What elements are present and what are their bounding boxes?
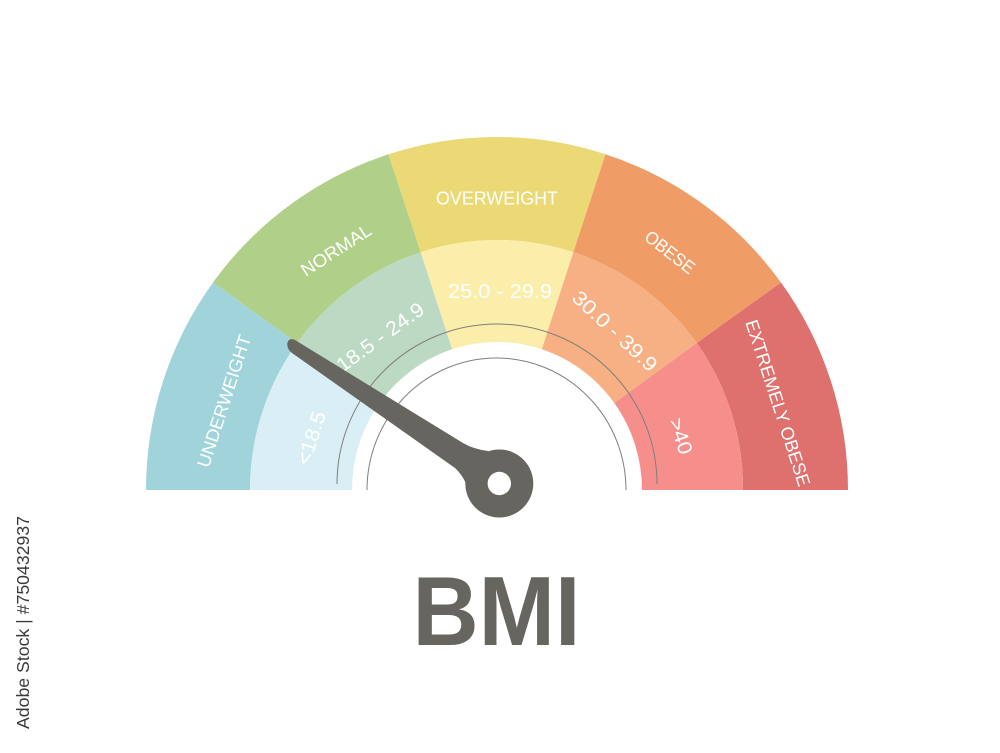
title: BMI	[412, 556, 580, 666]
inner thin scale arc	[367, 358, 626, 490]
label: obese: OBESE	[641, 227, 699, 278]
label: overweight: OVERWEIGHT	[436, 188, 558, 208]
panel: overweight segment	[388, 137, 606, 349]
side credit text: Adobe Stock | #750432937	[13, 516, 33, 729]
label: extremely obese: EXTREMELY OBESE	[741, 317, 814, 489]
outer thin scale arc	[337, 324, 657, 484]
panel: obese segment	[542, 154, 781, 403]
icon: gauge needle	[287, 339, 533, 518]
label: normal: NORMAL	[297, 220, 375, 280]
panel: underweight segment	[146, 282, 380, 490]
value: over 40: >40	[664, 415, 696, 457]
panel: extremely obese segment	[614, 282, 848, 490]
value: 25.0 to 29.9: 25.0 - 29.9	[448, 281, 552, 303]
label: underweight: UNDERWEIGHT	[193, 332, 255, 470]
value: 18.5 to 24.9: 18.5 - 24.9	[332, 299, 429, 377]
value: 30.0 to 39.9: 30.0 - 39.9	[567, 287, 661, 377]
value: under 18.5: <18.5	[293, 409, 331, 468]
panel: normal segment	[213, 154, 452, 403]
